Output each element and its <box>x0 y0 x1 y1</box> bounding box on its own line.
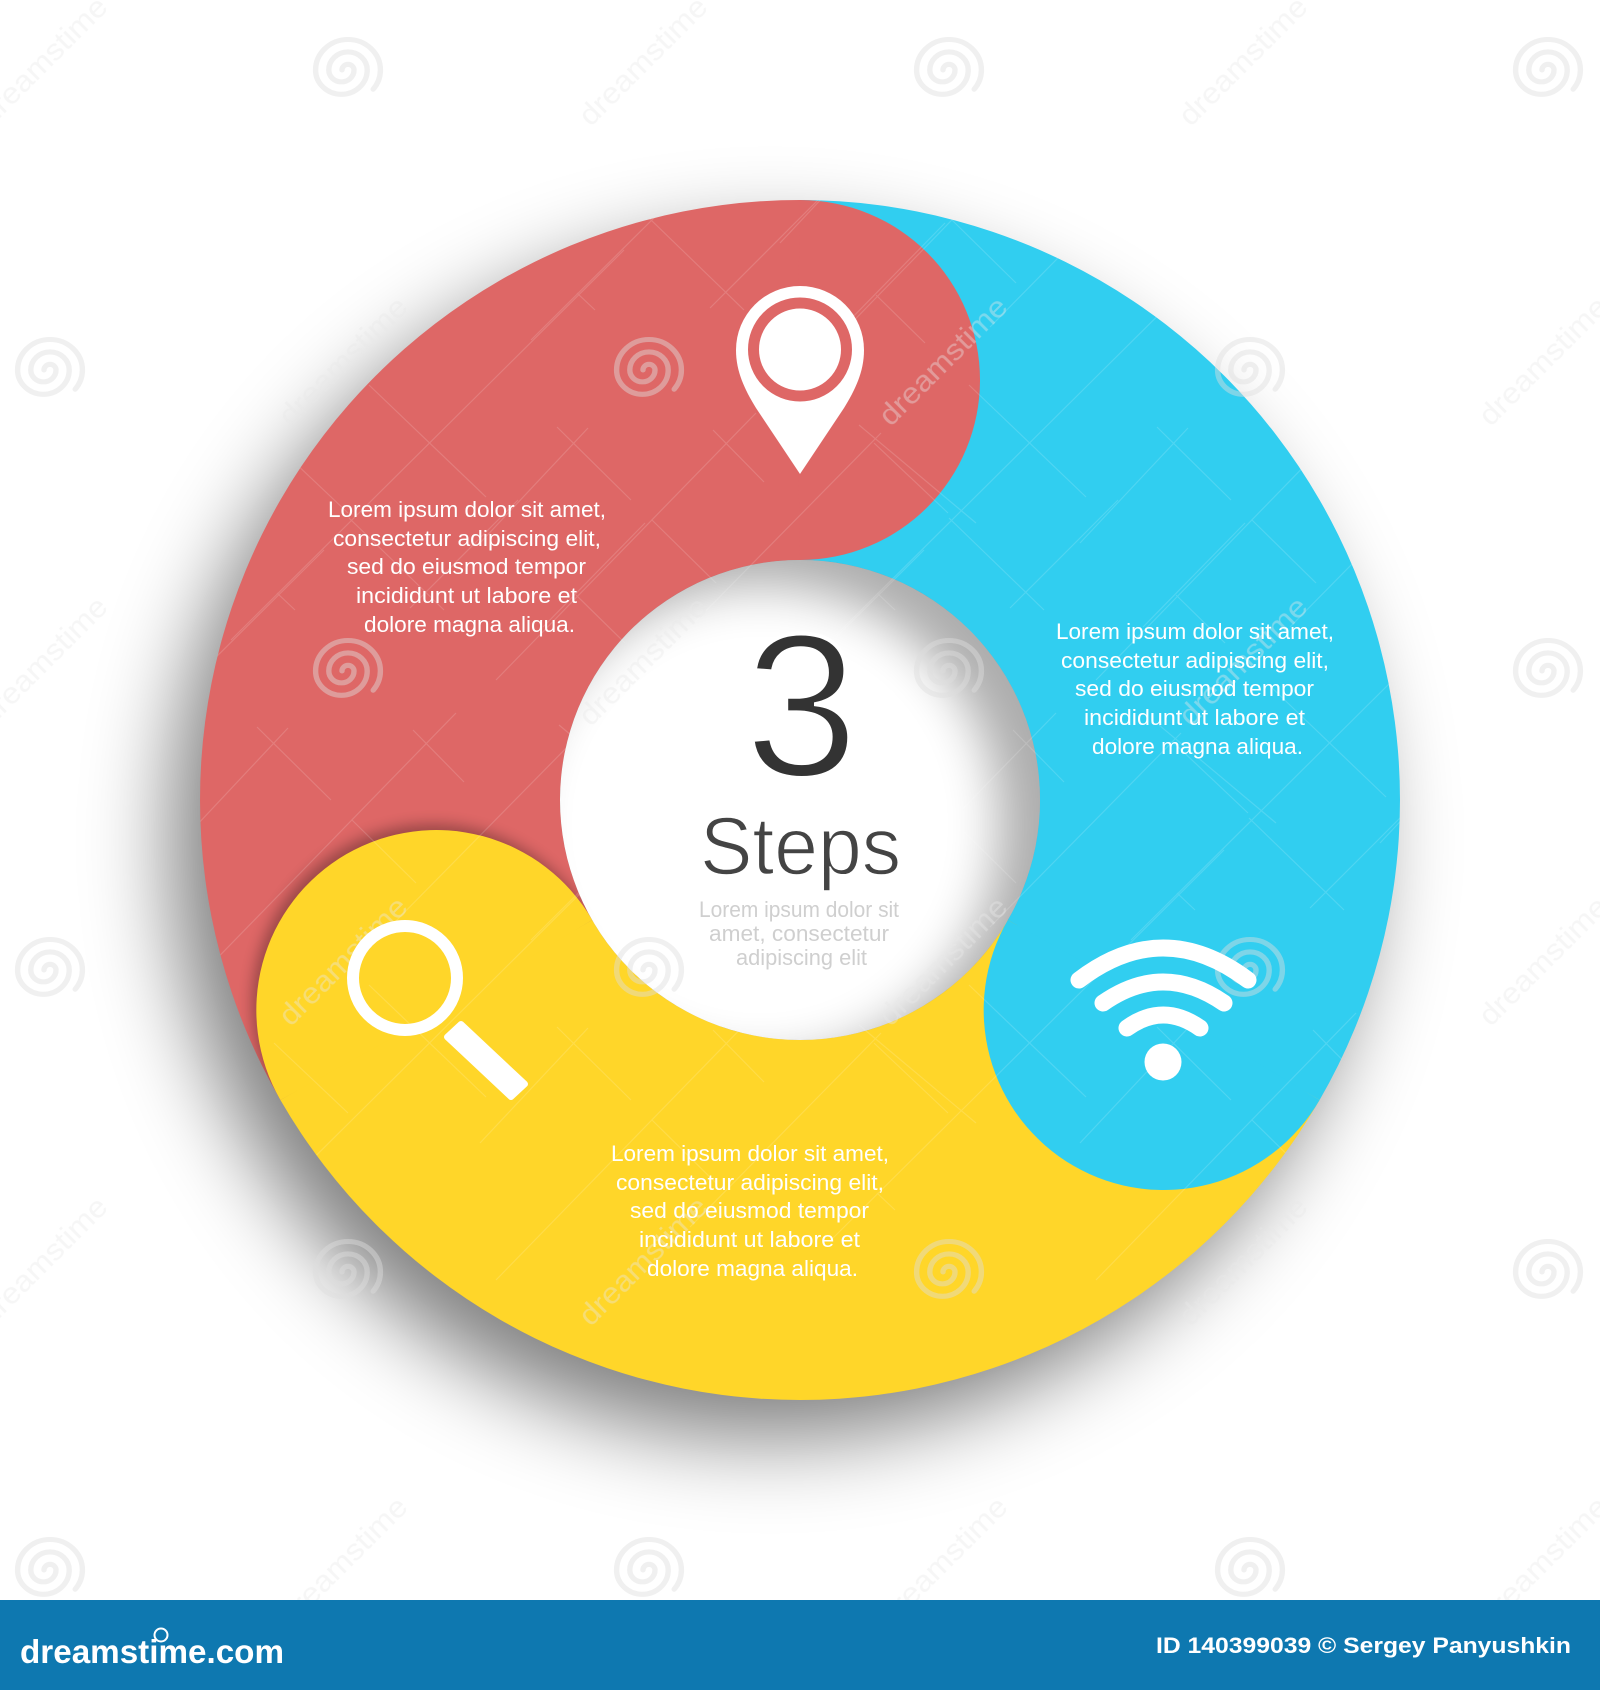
watermark wordmarks: dreamstime <box>272 1490 414 1632</box>
panel: blue ring segment <box>800 200 1400 1100</box>
text block: red segment: dolore magna aliqua. <box>364 612 575 637</box>
icon: wifi <box>1079 948 1248 1080</box>
number 3: 3 <box>745 592 858 820</box>
watermark lines (decorative) <box>200 200 1400 1280</box>
text block: yellow segment <box>611 1141 889 1281</box>
watermark wordmarks: dreamstime <box>872 1490 1014 1632</box>
watermark wordmarks: dreamstime <box>272 890 414 1032</box>
panel: red lobe <box>797 200 980 560</box>
center description: adipiscing elit <box>736 945 867 970</box>
text block: blue segment: dolore magna aliqua. <box>1092 734 1303 759</box>
center description: Lorem ipsum dolor sit <box>699 897 899 922</box>
text block: red segment: consectetur adipiscing elit, <box>333 526 601 551</box>
footer bar <box>0 1600 1600 1690</box>
text block: yellow segment: consectetur adipiscing elit, <box>616 1170 884 1195</box>
text block: blue segment: consectetur adipiscing elit, <box>1061 648 1329 673</box>
center description <box>699 897 899 970</box>
watermark wordmarks: dreamstime <box>1172 0 1314 132</box>
panel: red ring segment <box>200 200 800 1100</box>
yellow lobe shadow on red <box>252 824 588 1094</box>
center circle <box>560 560 1040 1040</box>
watermark wordmarks: dreamstime <box>572 0 714 132</box>
watermark wordmarks: dreamstime <box>872 890 1014 1032</box>
text block: red segment <box>328 497 606 637</box>
text block: yellow segment: incididunt ut labore et <box>639 1227 860 1252</box>
text block: blue segment: sed do eiusmod tempor <box>1075 676 1314 701</box>
footer logo: dreamstime.com <box>20 1633 284 1670</box>
watermark wordmarks: dreamstime <box>1172 1190 1314 1332</box>
heading: Steps: Steps <box>700 801 901 892</box>
text block: yellow segment: dolore magna aliqua. <box>647 1256 858 1281</box>
text block: yellow segment: Lorem ipsum dolor sit amet, <box>611 1141 889 1166</box>
icon: magnifying glass <box>353 926 525 1097</box>
disc drop shadow <box>172 242 1368 1438</box>
circular diagram <box>200 200 1400 1400</box>
panel: blue lobe <box>984 920 1320 1190</box>
text block: red segment: incididunt ut labore et <box>356 583 577 608</box>
watermark wordmarks: dreamstime <box>572 1190 714 1332</box>
panel: yellow ring segment <box>280 920 1320 1400</box>
text block: blue segment <box>1056 619 1334 759</box>
text block: red segment: Lorem ipsum dolor sit amet, <box>328 497 606 522</box>
text block: blue segment: Lorem ipsum dolor sit amet, <box>1056 619 1334 644</box>
text block: red segment: sed do eiusmod tempor <box>347 554 586 579</box>
watermark wordmarks: dreamstime <box>272 290 414 432</box>
watermark wordmarks: dreamstime <box>572 590 714 732</box>
icon: map pin <box>736 286 864 474</box>
text block: yellow segment: sed do eiusmod tempor <box>630 1198 869 1223</box>
center description: amet, consectetur <box>709 921 889 946</box>
watermark wordmarks: dreamstime <box>872 290 1014 432</box>
text block: blue segment: incididunt ut labore et <box>1084 705 1305 730</box>
footer credit: ID 140399039 © Sergey Panyushkin <box>1156 1633 1571 1658</box>
watermark wordmarks: dreamstime <box>1172 590 1314 732</box>
panel: yellow lobe <box>256 830 592 1100</box>
